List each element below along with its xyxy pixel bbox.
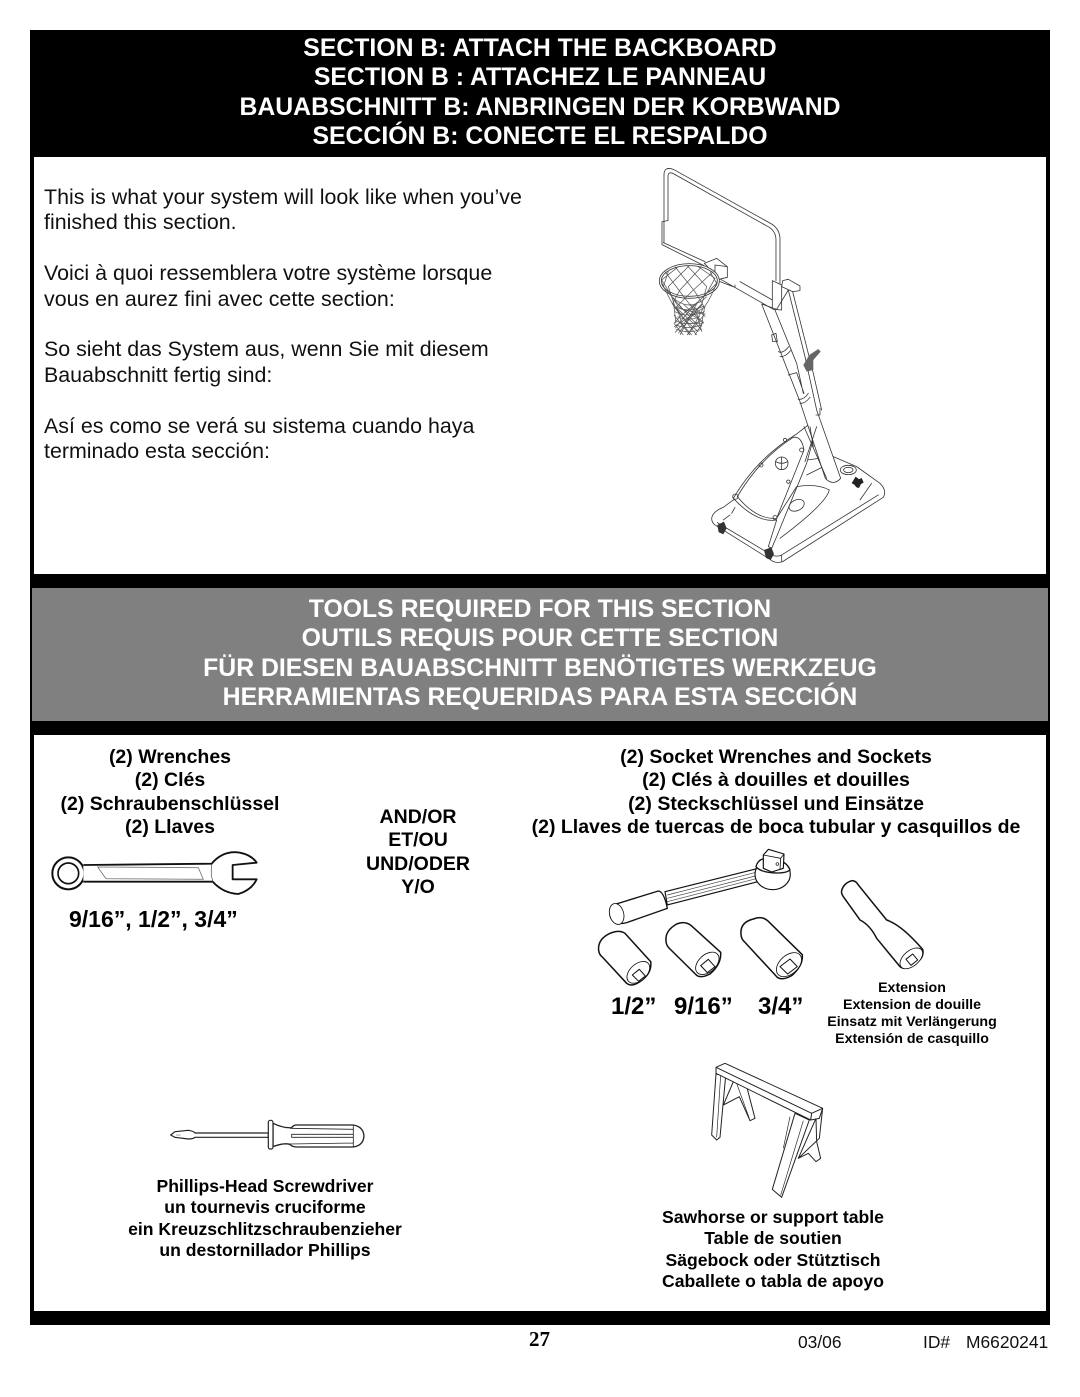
icon: sawhorse xyxy=(712,1063,823,1197)
heading: section title xyxy=(239,34,841,150)
heading: section title: SECCIÓN B: CONECTE EL RESPALDO xyxy=(312,123,768,150)
text block: socket wrenches label: (2) Llaves de tuercas de boca tubular y casquillos de xyxy=(532,816,1020,838)
text block: socket sizes: 1/2” xyxy=(611,993,656,1020)
text block: sawhorse label: Caballete o tabla de apoyo xyxy=(662,1271,884,1291)
text block: intro in four languages: finished this section. xyxy=(44,210,237,234)
text block: and/or: UND/ODER xyxy=(366,853,470,875)
text block: extension label: Einsatz mit Verlängerung xyxy=(827,1014,997,1030)
heading: section title: SECTION B: ATTACH THE BACKBOARD xyxy=(303,34,777,62)
icon: basketball system xyxy=(659,168,885,562)
heading: section title: SECTION B : ATTACHEZ LE PANNEAU xyxy=(314,64,766,91)
text block: socket wrenches label: (2) Steckschlüssel und Einsätze xyxy=(628,793,924,815)
text block: extension label: Extensión de casquillo xyxy=(835,1031,989,1047)
heading: section title: BAUABSCHNITT B: ANBRINGEN DER KORBWAND xyxy=(239,94,841,121)
text block: intro in four languages: Voici à quoi ressemblera votre système lorsque xyxy=(44,261,492,285)
panel: tools banner xyxy=(32,588,1048,721)
text block: extension label xyxy=(827,980,997,1047)
heading: tools required: TOOLS REQUIRED FOR THIS SECTION xyxy=(309,596,771,622)
text block: intro in four languages: vous en aurez fini avec cette section: xyxy=(44,287,395,311)
heading: tools required: OUTILS REQUIS POUR CETTE SECTION xyxy=(302,625,778,652)
text block: wrenches label: (2) Wrenches xyxy=(109,746,231,768)
icon: three sockets xyxy=(599,918,806,987)
text block: wrenches label: (2) Llaves xyxy=(125,816,215,838)
text block: wrenches label: (2) Clés xyxy=(135,769,205,791)
text block: socket wrenches label xyxy=(532,746,1020,838)
icon: screwdriver xyxy=(171,1120,364,1149)
text block: screwdriver label: ein Kreuzschlitzschraubenzieher xyxy=(128,1219,402,1239)
text block: intro in four languages: This is what your system will look like when you’ve xyxy=(44,185,522,209)
footer id xyxy=(923,1332,1048,1352)
heading: tools required: HERRAMIENTAS REQUERIDAS PARA ESTA SECCIÓN xyxy=(223,684,857,711)
text block: socket sizes: 9/16” xyxy=(674,993,733,1020)
text block: screwdriver label xyxy=(128,1176,402,1260)
text block: intro in four languages: Así es como se verá su sistema cuando haya xyxy=(44,414,474,438)
text block: screwdriver label: un tournevis cruciforme xyxy=(164,1197,366,1217)
text block: and/or: AND/OR xyxy=(380,806,456,828)
panel: result preview xyxy=(34,157,1046,574)
text block: extension label: Extension de douille xyxy=(843,997,981,1013)
text block: sawhorse label: Sawhorse or support table xyxy=(662,1207,884,1227)
text block: wrench sizes: 9/16”, 1/2”, 3/4” xyxy=(69,906,238,932)
text block: screwdriver label: Phillips-Head Screwdriver xyxy=(156,1176,374,1196)
text block: socket wrenches label: (2) Clés à douilles et douilles xyxy=(642,769,910,791)
text block: intro in four languages: terminado esta sección: xyxy=(44,439,270,463)
text block: socket wrenches label: (2) Socket Wrenches and Sockets xyxy=(620,746,932,768)
text block: and/or xyxy=(366,806,470,898)
text block: wrenches label xyxy=(61,746,279,838)
text block: and/or: Y/O xyxy=(401,876,435,898)
text block: sawhorse label xyxy=(662,1207,884,1291)
page number: 27 xyxy=(529,1327,550,1351)
icon: combination wrench xyxy=(52,852,257,894)
panel: tools list xyxy=(34,735,1046,1311)
footer id: M6620241 xyxy=(966,1332,1048,1352)
text block: sawhorse label: Sägebock oder Stütztisch xyxy=(665,1250,881,1270)
text block: intro in four languages xyxy=(44,185,522,463)
footer date: 03/06 xyxy=(798,1332,842,1352)
text block: socket sizes: 3/4” xyxy=(758,993,803,1020)
icon: socket extension xyxy=(842,881,926,973)
text block: intro in four languages: Bauabschnitt fertig sind: xyxy=(44,363,272,387)
text block: sawhorse label: Table de soutien xyxy=(704,1228,842,1248)
text block: extension label: Extension xyxy=(878,980,946,996)
footer id: ID# xyxy=(923,1332,950,1352)
text block: screwdriver label: un destornillador Phillips xyxy=(159,1240,371,1260)
text block: wrenches label: (2) Schraubenschlüssel xyxy=(61,793,279,815)
text block: and/or: ET/OU xyxy=(388,829,448,851)
heading: tools required xyxy=(203,596,877,711)
heading: tools required: FÜR DIESEN BAUABSCHNITT BENÖTIGTES WERKZEUG xyxy=(203,655,877,682)
text block: intro in four languages: So sieht das System aus, wenn Sie mit diesem xyxy=(44,337,489,361)
icon: socket wrench xyxy=(607,849,790,926)
text block: socket sizes xyxy=(611,993,803,1020)
